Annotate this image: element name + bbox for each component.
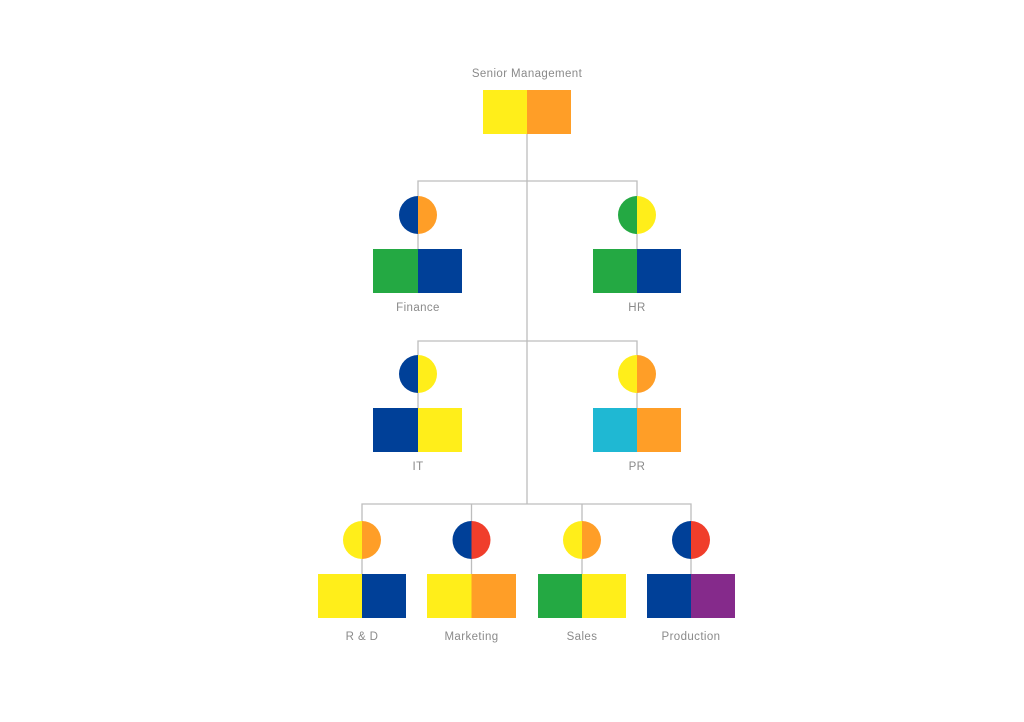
node: R & D: R & D (346, 631, 378, 643)
node: Finance: Finance (396, 302, 440, 314)
node: Senior Management (472, 68, 583, 134)
node: PR: PR (629, 461, 645, 473)
node: HR: HR (628, 302, 646, 314)
node: R & D (318, 521, 406, 643)
node: HR (593, 196, 681, 314)
node: Marketing: Marketing (444, 631, 499, 643)
node: Sales (538, 521, 626, 643)
node: Sales: Sales (567, 631, 597, 643)
node: Marketing (427, 521, 516, 643)
node: Finance (373, 196, 462, 314)
node: Senior Management: Senior Management (472, 68, 583, 80)
node: PR (593, 355, 681, 473)
node: Production: Production (662, 631, 720, 643)
node: IT: IT (412, 461, 424, 473)
connector lines (362, 134, 691, 574)
node: IT (373, 355, 462, 473)
node: Production (647, 521, 735, 643)
